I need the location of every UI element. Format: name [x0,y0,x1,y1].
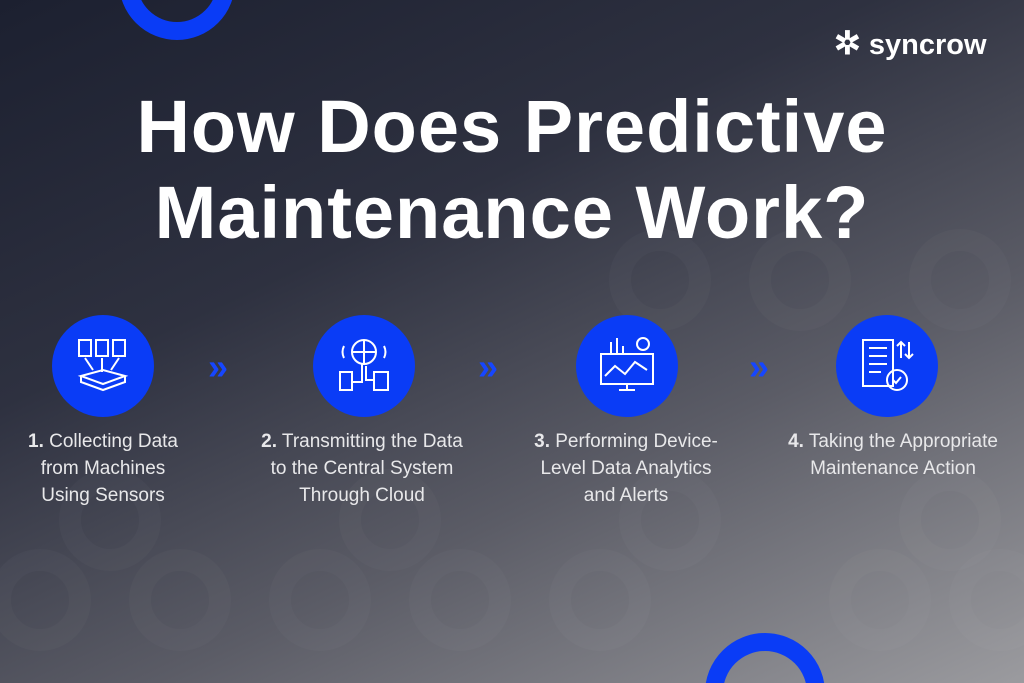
label 1 [28,431,178,506]
logo: ✲ syncrow [834,25,987,61]
label 2: Through Cloud [299,485,425,506]
label 4 [788,431,998,479]
step 2 icon [313,315,415,417]
arrow 1: » [208,346,228,387]
arrow 3: » [749,346,769,387]
step 4 icon [836,315,938,417]
arrow 2: » [478,346,498,387]
step 3 icon [576,315,678,417]
label 1: 1. Collecting Data [28,431,178,452]
label 1: Using Sensors [41,485,165,506]
label 1: from Machines [41,458,165,479]
label 2: 2. Transmitting the Data [261,431,463,452]
title line 2: Maintenance Work? [155,171,869,254]
label 4: 4. Taking the Appropriate [788,431,998,452]
step 1 icon [52,315,154,417]
label 2 [261,431,463,506]
decorative ring top [119,0,235,40]
label 4: Maintenance Action [810,458,976,479]
label 3 [534,431,718,506]
label 3: Level Data Analytics [540,458,712,479]
label 3: 3. Performing Device- [534,431,718,452]
decorative ring bottom [705,633,825,683]
label 2: to the Central System [271,458,453,479]
label 3: and Alerts [584,485,668,506]
title: How Does Predictive [136,85,888,168]
